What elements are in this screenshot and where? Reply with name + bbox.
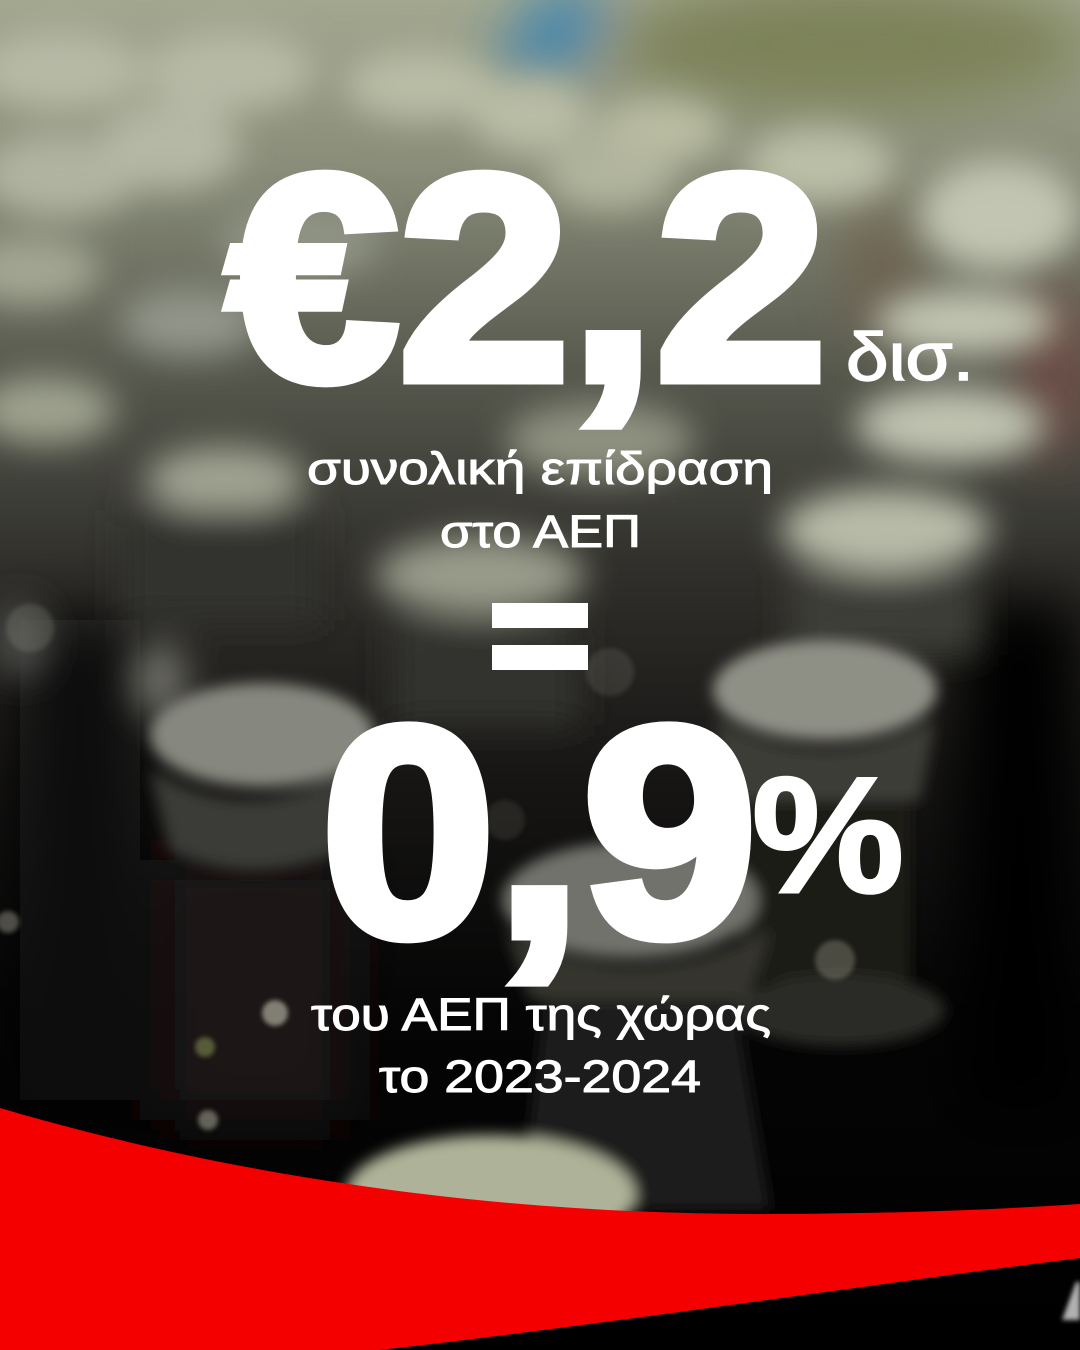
percentage figure: 0,9%: 0,9	[321, 666, 757, 999]
equals sign	[492, 603, 588, 670]
headline figure: €2,2 δισ.: δισ.	[846, 319, 974, 395]
caption: total GDP impact: στο ΑΕΠ	[440, 506, 641, 557]
caption: total GDP impact: συνολική επίδραση	[307, 443, 773, 494]
caption: total GDP impact	[307, 443, 773, 557]
percentage figure: 0,9%: %	[752, 743, 904, 927]
caption: share of national GDP	[311, 989, 771, 1102]
red swoosh	[0, 1108, 1080, 1350]
headline figure: €2,2 δισ.: €2,2	[227, 115, 827, 441]
caption: share of national GDP: του ΑΕΠ της χώρας	[311, 989, 771, 1040]
caption: share of national GDP: το 2023-2024	[379, 1051, 701, 1102]
